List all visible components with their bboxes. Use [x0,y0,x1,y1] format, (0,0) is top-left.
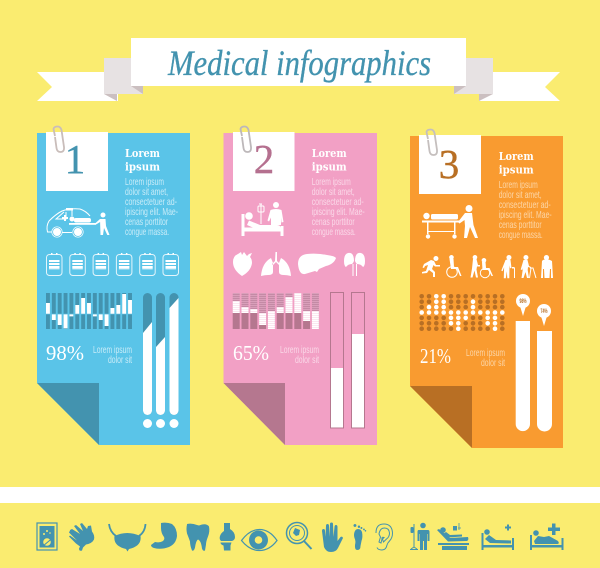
stat: 98%: 98% [46,341,84,365]
stat caption [93,344,132,366]
icon: person with walker [521,255,531,278]
icon: ambulance [47,208,110,237]
body text: consectetuer ad- [312,196,364,208]
icon: stomach [151,523,177,549]
note card with number 3: 3 [439,141,459,187]
icon: patient in bed with nurse [242,202,284,236]
stat caption: Lorem ipsum [93,344,132,356]
stat: 65%: 65% [233,341,269,365]
icon: person with cane [501,255,515,278]
note card with number 3 [419,135,481,194]
body text: cenas porttitor [312,216,355,228]
heading: ipsum [312,160,347,174]
stat caption: Lorem ipsum [280,344,319,356]
icon: hospital bed with small cross [482,524,514,550]
icon: hand with drop [69,523,94,551]
icons: blood bags [46,253,178,276]
paperclip [240,126,251,152]
icon: liver [298,254,336,274]
panel 3: orange [410,130,563,448]
icons: organs [233,252,365,276]
icon: tooth [186,524,209,551]
icon: running person [422,256,440,277]
stat: 21%: 21% [420,344,451,368]
heading: ipsum [499,164,534,176]
body text: consectetuer ad- [499,199,551,211]
bar chart: striped columns [233,293,319,329]
panel 2: pink [224,126,377,445]
icon: stretcher and paramedic [422,205,478,239]
body text: consectetuer ad- [125,196,177,208]
icon: recliner chair with patient [437,523,469,550]
note card with number 1 [46,132,108,191]
white band [0,487,600,503]
body text [312,176,365,238]
body text: Lorem ipsum [312,176,351,188]
body text: congue massa. [125,226,169,238]
bar chart: diverging bars [46,293,132,329]
stat caption: dolor sit [108,354,132,366]
icon: knee joint [220,523,235,550]
heading: Lorem [499,150,534,163]
heading: ipsum [125,160,160,174]
icon: open hand [322,522,343,552]
note card with number 2 [233,132,294,191]
note card with number 2: 2 [254,136,274,182]
icon: helper pushing wheelchair [470,255,493,278]
icon: magnifier [286,522,312,549]
pin: 74%: 74% [540,309,548,315]
pin: 98%: 98% [520,299,527,305]
body text: ipiscing elit. Mae- [312,206,365,218]
paperclip [426,130,437,155]
icon: lungs [261,252,291,276]
body text: dolor sit amet, [125,186,168,198]
icon: person with crutches [541,255,553,278]
icon: hospital bed with large cross [530,524,564,550]
icon: bladder [109,524,146,552]
icon: pill box [37,523,57,550]
icon: kidneys [344,253,365,276]
title ribbon [37,38,560,101]
icon: heart [233,252,252,276]
stat caption: Lorem ipsum [466,347,505,359]
stat caption: dolor sit [295,354,319,366]
body text: congue massa. [499,229,543,241]
body text: ipiscing elit. Mae- [125,206,178,218]
icon: person with IV stand [410,523,430,550]
icon: ear [376,524,392,550]
stat caption [280,344,319,366]
paperclip [54,126,64,152]
panel 1: blue [37,126,190,445]
body text: cenas porttitor [499,219,542,231]
bar chart: two outlined bars [330,292,364,428]
heading: Lorem [312,147,347,160]
icon: eye [242,530,277,550]
body text [125,176,178,238]
test tube bars with pins [516,294,552,432]
dot matrix chart [419,294,505,331]
icon row: medical symbols [37,522,564,552]
bar chart: three rounded bars [143,293,178,428]
body text: dolor sit amet, [312,186,355,198]
body text: cenas porttitor [125,216,168,228]
stat caption [466,347,505,369]
body text: dolor sit amet, [499,189,542,201]
icon: wheelchair [449,255,462,276]
body text: ipiscing elit. Mae- [499,209,552,221]
note card with number 1: 1 [65,136,85,182]
icon: foot [353,524,366,550]
icons: mobility people [422,255,553,278]
body text: congue massa. [312,226,356,238]
title text: Medical infographics [167,43,431,83]
body text: Lorem ipsum [499,179,538,191]
body text: Lorem ipsum [125,176,164,188]
body text [499,179,552,241]
heading: Lorem [125,147,160,160]
stat caption: dolor sit [481,357,505,369]
